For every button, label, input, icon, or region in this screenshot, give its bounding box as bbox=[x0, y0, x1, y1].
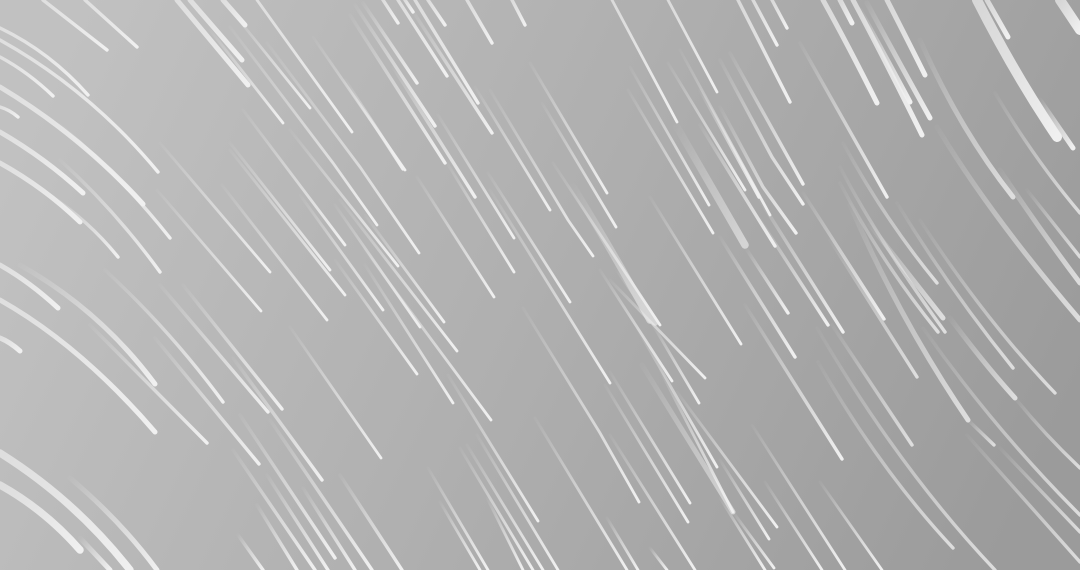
streaks: lower-left arcs bbox=[0, 265, 155, 432]
streaks: far-right arc tip bbox=[987, 0, 1073, 148]
streaks: right thin arcs bbox=[817, 93, 1080, 570]
streaks: upper-left arcs thick bbox=[0, 87, 143, 222]
streaks: far-right thick arcs bbox=[977, 0, 1080, 137]
streaks: bottom-left faint arcs bbox=[70, 478, 157, 570]
streaks: top-right arcs bbox=[823, 0, 930, 135]
streaks: upper-left diagonals bold bbox=[177, 0, 248, 85]
streaks: upper-left diagonals bbox=[157, 0, 491, 458]
streaks: lower-left thin arcs bbox=[90, 270, 402, 570]
streaks: lower-centre diagonals bbox=[428, 328, 882, 570]
streaks: right long arcs bbox=[850, 40, 1080, 420]
streaks: centre bands bbox=[573, 127, 745, 322]
streaks: upper-centre bundle bbox=[345, 0, 525, 197]
streaks: upper-left arcs thin bbox=[0, 0, 170, 272]
streaks: upper-right diagonals bbox=[700, 0, 887, 459]
streaks: lower-centre band bbox=[642, 365, 733, 512]
streaks: bottom-left thick arcs bbox=[0, 453, 130, 570]
streaks: centre diagonals bbox=[417, 0, 770, 502]
